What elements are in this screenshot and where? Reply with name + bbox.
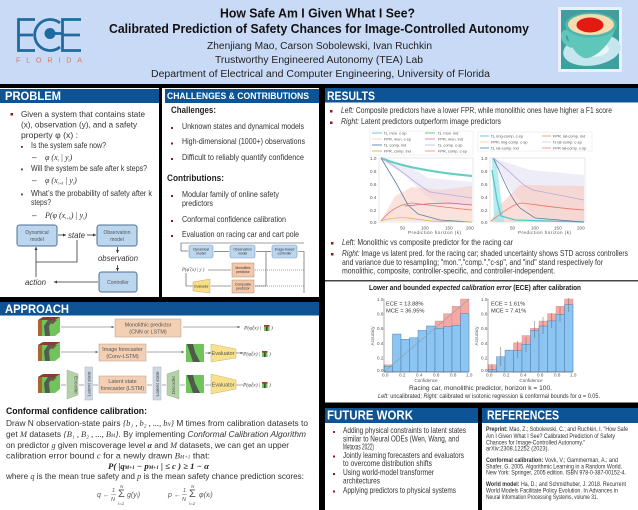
text block: reference list: arXiv:2308.12252 (2023). bbox=[486, 446, 549, 452]
bar chart: calibrated: ECE = 1.61% bbox=[491, 302, 525, 308]
formula: mean estimators: g(yi) bbox=[127, 492, 140, 499]
diagram: monolithic predictor pipeline: ) bbox=[270, 324, 273, 332]
text block: problem statement: – bbox=[32, 153, 37, 162]
diagram: latent state forecaster pipeline: ) bbox=[268, 382, 271, 388]
legend: left chart: f1, mon. c-sp bbox=[384, 130, 406, 136]
diagram: modular predictors bbox=[181, 243, 304, 293]
diagram: image forecaster pipeline: Evaluator bbox=[212, 351, 235, 357]
legend: right chart: FPR, lat-comp. ind bbox=[553, 134, 585, 138]
bar chart: uncalibrated: 0.4 bbox=[416, 372, 423, 378]
bar chart: uncalibrated: 0.6 bbox=[433, 372, 440, 378]
bar chart: calibrated: 1.0 bbox=[570, 372, 577, 378]
heading: references: REFERENCES bbox=[487, 408, 559, 422]
legend: right chart: f1, lat-comp. ind bbox=[491, 146, 519, 150]
text block: problem statement: steps? bbox=[31, 198, 51, 207]
legend: left chart: f1, comp. ind bbox=[384, 142, 406, 148]
text block: problem statement: | y bbox=[63, 176, 73, 185]
text block: conformal confidence calibration: Draw N observation-state pairs {b₁ , b₂ , ..., bN} M times from calibration datasets to bbox=[6, 418, 308, 428]
text block: problem statement: ) bbox=[73, 176, 77, 185]
text block: challenges: High-dimensional (1000+) observations bbox=[182, 137, 305, 146]
heading: problem: PROBLEM bbox=[5, 91, 61, 103]
text block: results bottom bullets: Left: Monolithic vs composite predictor for the racing car bbox=[342, 238, 513, 247]
heading: problem bbox=[0, 89, 159, 103]
line chart: monolithic vs composite: 1.0 bbox=[370, 156, 377, 161]
text block: contributions: predictors bbox=[182, 199, 213, 208]
text block: future work items: Adding physical constraints to latent states bbox=[343, 426, 466, 435]
line chart: image vs latent: 0.4 bbox=[481, 195, 488, 200]
bar chart: uncalibrated: 0.4 bbox=[377, 341, 384, 346]
authors and affiliation bbox=[151, 41, 490, 80]
bar chart: calibrated: 0.4 bbox=[481, 341, 488, 346]
text block: results bottom bullets: monolithic, composite, controller-specific, and controller-independent. bbox=[342, 266, 555, 276]
heading: results: RESULTS bbox=[327, 89, 375, 103]
text block: problem statement: t bbox=[73, 180, 75, 186]
line chart: monolithic vs composite bbox=[370, 156, 474, 235]
line chart: monolithic vs composite: 0.0 bbox=[370, 220, 377, 225]
diagram: modular predictors: controller bbox=[278, 252, 292, 256]
heading: results bbox=[325, 88, 638, 103]
diagram: modular predictors: Evaluator bbox=[194, 284, 210, 288]
diagram: image forecaster pipeline bbox=[38, 342, 271, 362]
diagram: closed-loop system: observation bbox=[98, 254, 139, 263]
text block: problem statement: t bbox=[58, 158, 60, 162]
legend: right chart: FPR lat-comp. c-sp bbox=[553, 146, 586, 150]
heading: approach bbox=[0, 302, 319, 316]
bar chart: calibrated: Accuracy bbox=[474, 326, 479, 345]
text block: results bottom bullets bbox=[331, 238, 628, 276]
text block: conformal confidence calibration bbox=[6, 406, 308, 460]
diagram: modular predictors: predictor bbox=[236, 286, 250, 290]
text block: challenges bbox=[171, 105, 305, 162]
bar chart: uncalibrated: 0.8 bbox=[377, 312, 384, 316]
chart caption: Left: uncalibrated; Right: calibrated w/ isotonic regression & conformal bounds for α = 0.05. bbox=[378, 393, 600, 400]
text block: problem statement: Will the system be safe after k steps? bbox=[31, 164, 147, 173]
line chart: image vs latent: 1.0 bbox=[481, 156, 488, 161]
text block: future work items: architectures bbox=[343, 476, 380, 486]
bar chart: calibrated: MCE = 7.41% bbox=[491, 308, 526, 314]
legend: right chart: f1 lat-comp. c-sp bbox=[553, 140, 582, 144]
line chart: image vs latent: Prediction horizon (k) bbox=[518, 230, 571, 235]
text block: problem statement: t bbox=[69, 158, 71, 162]
diagram: modular predictors: P(φ̃ (x) | y ) bbox=[181, 268, 205, 273]
text block: contributions: Modular family of online safety bbox=[182, 190, 280, 199]
diagram: modular predictors: Monolithic bbox=[235, 266, 251, 270]
heading: challenges and contributions: CHALLENGES & CONTRIBUTIONS bbox=[167, 91, 309, 102]
diagram: closed-loop system: Observation bbox=[104, 230, 131, 236]
text block: contributions bbox=[167, 173, 299, 239]
line chart: image vs latent: 0.2 bbox=[481, 208, 488, 213]
bar chart: calibrated: Confidence bbox=[519, 378, 543, 383]
panel: results bbox=[325, 88, 638, 280]
line chart: image vs latent: 0.6 bbox=[481, 182, 488, 187]
text block: problem statement: Is the system safe now? bbox=[31, 141, 106, 150]
text block: problem statement: t+k bbox=[65, 216, 71, 220]
bar chart: calibrated: 0.4 bbox=[520, 372, 527, 378]
formula: mean estimators: p ← bbox=[167, 492, 181, 499]
text block: future work items: Metaxas 2022) bbox=[343, 442, 374, 452]
diagram: monolithic predictor pipeline: Monolithic predictor bbox=[125, 322, 172, 328]
bar chart: uncalibrated: 0.0 bbox=[377, 368, 384, 373]
diagram: image forecaster pipeline: Image forecaster bbox=[102, 347, 143, 353]
bar chart: uncalibrated: 0.8 bbox=[450, 372, 457, 378]
text block: problem statement: ) bbox=[83, 211, 87, 220]
legend: left chart: f1, mon. ind bbox=[438, 130, 458, 136]
diagram: latent state forecaster pipeline: Evaluator bbox=[212, 382, 235, 388]
legend: right chart bbox=[478, 132, 592, 151]
text block: results top bullets bbox=[330, 106, 612, 126]
text block: conformal confidence calibration: on predictor g given miscoverage level α and M datasets, we can get an upper bbox=[6, 440, 289, 450]
text block: challenges: Unknown states and dynamical models bbox=[182, 122, 304, 131]
bar chart: uncalibrated: Confidence bbox=[414, 378, 438, 383]
diagram: latent state forecaster pipeline: Encoder bbox=[72, 376, 78, 394]
diagram: closed-loop system bbox=[17, 225, 139, 292]
text block: reference list: Conformal calibration: Vovk, V.; Gammerman, A.; and bbox=[486, 457, 618, 464]
diagram: latent state forecaster pipeline: forecaster (LSTM) bbox=[101, 386, 144, 392]
diagram: latent state forecaster pipeline bbox=[38, 367, 271, 400]
formula: mean estimators: 1 bbox=[112, 488, 115, 494]
text block: problem statement: – bbox=[32, 211, 37, 220]
logo: ECE Florida: FLORIDA bbox=[16, 56, 82, 64]
text block: conformal confidence calibration: Conformal confidence calibration: bbox=[6, 406, 147, 416]
line chart: image vs latent: 0.8 bbox=[481, 169, 488, 174]
logo: ECE Florida bbox=[16, 20, 82, 64]
line chart: image vs latent: 50 bbox=[510, 226, 516, 230]
legend: right chart: FPR, img-comp. c-sp bbox=[491, 140, 528, 144]
legend: right chart: f1, img-comp. c-sp bbox=[491, 134, 523, 138]
line chart: monolithic vs composite: 0.8 bbox=[370, 169, 377, 174]
panel: references bbox=[482, 408, 638, 510]
panel: problem bbox=[0, 88, 159, 297]
line chart: image vs latent: 0.0 bbox=[481, 220, 488, 225]
diagram: monolithic predictor pipeline: (CNN or LSTM) bbox=[129, 330, 167, 336]
text block: future work items bbox=[333, 426, 466, 495]
formula: mean estimators: N bbox=[111, 497, 115, 503]
heading: approach: APPROACH bbox=[5, 302, 69, 316]
text block: challenges: Challenges: bbox=[171, 105, 216, 115]
diagram: closed-loop system: Dynamical bbox=[25, 230, 49, 236]
legend: left chart: FPR, comp. ind bbox=[384, 148, 411, 154]
bar chart: uncalibrated: 0.0 bbox=[382, 372, 389, 378]
diagram: closed-loop system: Controller bbox=[107, 280, 129, 286]
chart caption: Racing car, monolithic predictor, horizon k = 100. bbox=[409, 385, 552, 392]
panel: calibration results bbox=[325, 280, 638, 402]
text block: future work items: Applying predictors to physical systems bbox=[343, 486, 456, 495]
text block: results top bullets: Right: Latent predictors outperform image predictors bbox=[341, 117, 501, 126]
formula: mean estimators: i=1 bbox=[118, 501, 125, 506]
formula: mean estimators: q ← bbox=[97, 492, 110, 499]
bar chart: uncalibrated: MCE = 36.95% bbox=[386, 308, 424, 314]
title: Calibrated Prediction of Safety Chances for Image-Controlled Autonomy bbox=[109, 22, 529, 36]
authors and affiliation: Trustworthy Engineered Autonomy (TEA) Lab bbox=[215, 55, 423, 66]
line chart: monolithic vs composite: 200 bbox=[466, 226, 474, 230]
text block: conformal confidence calibration: get M datasets {B₁ , B₂ , ..., BM}. By implementing Conformal Calibration Algorithm bbox=[6, 429, 306, 439]
text block: problem statement: φ (x bbox=[45, 153, 58, 162]
bar chart: calibrated: 0.2 bbox=[503, 372, 510, 378]
diagram: closed-loop system: model bbox=[110, 237, 124, 243]
panel: challenges and contributions bbox=[162, 88, 319, 297]
bar chart: calibrated bbox=[474, 297, 577, 383]
text block: future work items: Using world-model transformer bbox=[343, 468, 434, 477]
bar chart: calibrated: 1.0 bbox=[481, 297, 488, 302]
bar chart: uncalibrated bbox=[370, 297, 473, 383]
text block: contributions: Evaluation on racing car and cart pole bbox=[182, 230, 299, 239]
line chart: monolithic vs composite: 50 bbox=[400, 226, 406, 230]
text block: problem statement: What’s the probability of safety after k bbox=[31, 189, 153, 198]
line chart: image vs latent: 150 bbox=[554, 226, 562, 230]
icon: tea cup bbox=[558, 7, 623, 72]
diagram: closed-loop system: state bbox=[68, 231, 86, 240]
text block: problem statement: – bbox=[32, 176, 37, 185]
legend: left chart: FPR, mon. ind bbox=[438, 136, 463, 142]
heading: future work bbox=[325, 408, 478, 423]
line chart: monolithic vs composite: 0.4 bbox=[370, 195, 377, 200]
bar chart: uncalibrated: Accuracy bbox=[370, 326, 375, 345]
line chart: image vs latent bbox=[481, 156, 585, 235]
legend: left chart: f1, comp. c-sp bbox=[438, 142, 462, 148]
text block: future work items: to overcome distribution shifts bbox=[343, 459, 432, 468]
diagram: latent state forecaster pipeline: Latent state bbox=[86, 371, 92, 397]
title: How Safe Am I Given What I See? bbox=[220, 6, 415, 20]
diagram: modular predictors: Dynamical bbox=[193, 248, 209, 252]
formula: mean estimators: Σ bbox=[189, 488, 196, 500]
text block: problem statement: t+k bbox=[58, 180, 63, 186]
text block: problem statement: Given a system that contains state bbox=[21, 109, 145, 119]
text block: reference list: Chances for Image-Controlled Autonomy." bbox=[486, 440, 586, 446]
bar chart: uncalibrated: 1.0 bbox=[377, 297, 384, 302]
authors and affiliation: Department of Electrical and Computer Engineering, University of Florida bbox=[151, 69, 490, 80]
line chart: monolithic vs composite: 150 bbox=[445, 226, 453, 230]
formula: mean estimators bbox=[97, 484, 213, 506]
text block: reference list: Neural Information Processing Systems, volume 31. bbox=[486, 494, 598, 501]
diagram: monolithic predictor pipeline bbox=[38, 317, 273, 337]
header band bbox=[0, 0, 638, 84]
text block: problem statement: t bbox=[83, 216, 85, 220]
diagram: image forecaster pipeline: ) bbox=[268, 350, 271, 358]
bar chart: calibrated: 0.0 bbox=[486, 372, 493, 378]
text block: problem statement: P(φ (x bbox=[45, 211, 65, 220]
formula: mean estimators: N bbox=[191, 484, 195, 489]
diagram: latent state forecaster pipeline: Decoder bbox=[171, 376, 177, 394]
formula: mean estimators: N bbox=[120, 484, 124, 489]
formula: mean estimators: N bbox=[182, 497, 186, 503]
text block: problem statement: property φ (x) : bbox=[21, 130, 78, 140]
diagram: modular predictors: Image-based bbox=[275, 248, 295, 252]
text block: conformal confidence calibration: calibration error bound c for a newly drawn BM+1 that: bbox=[6, 450, 210, 460]
diagram: latent state forecaster pipeline: Latent state bbox=[155, 371, 161, 397]
authors and affiliation: Zhenjiang Mao, Carson Sobolewski, Ivan Ruchkin bbox=[207, 41, 432, 52]
line chart: monolithic vs composite: 100 bbox=[421, 226, 429, 230]
text block: future work items: similar to Neural ODEs (Wen, Wang, and bbox=[343, 434, 459, 444]
text block: problem statement: | y bbox=[59, 153, 69, 162]
diagram: latent state forecaster pipeline: Latent state bbox=[108, 379, 137, 385]
heading: references bbox=[482, 408, 638, 423]
line chart: image vs latent: 100 bbox=[531, 226, 539, 230]
panel: approach bbox=[0, 302, 319, 510]
bar chart: calibrated: 0.6 bbox=[537, 372, 544, 378]
legend: left chart: FPR, mon. c-sp bbox=[384, 136, 411, 142]
line chart: monolithic vs composite: 0.2 bbox=[370, 208, 377, 213]
diagram: modular predictors: Observation bbox=[233, 248, 252, 252]
line chart: image vs latent: 200 bbox=[577, 226, 585, 230]
bar chart: uncalibrated: 0.2 bbox=[399, 372, 406, 378]
legend: left chart bbox=[370, 130, 473, 155]
diagram: modular predictors: predictor bbox=[236, 270, 250, 274]
bar chart: uncalibrated: ECE = 13.88% bbox=[386, 302, 423, 308]
text block: problem statement: ) | y bbox=[70, 211, 84, 220]
text block: problem statement: ) bbox=[69, 153, 73, 162]
legend: left chart: FPR, comp. c-sp bbox=[438, 148, 467, 154]
text block: problem statement bbox=[10, 109, 153, 220]
formula: mean estimators: Σ bbox=[118, 488, 125, 500]
diagram: latent state forecaster pipeline: P(φ̃(x) | bbox=[242, 382, 261, 388]
diagram: closed-loop system: model bbox=[30, 237, 44, 243]
bar chart: calibrated: 0.8 bbox=[481, 312, 488, 316]
bar chart: calibrated: 0.0 bbox=[481, 368, 488, 373]
bar chart: calibrated: 0.2 bbox=[481, 356, 488, 360]
diagram: monolithic predictor pipeline: P(φ̃(x) | bbox=[243, 324, 262, 332]
diagram: image forecaster pipeline: P(φ̃(x) | bbox=[242, 350, 261, 358]
diagram: closed-loop system: action bbox=[25, 278, 47, 287]
line chart: monolithic vs composite: Prediction horizon (k) bbox=[408, 230, 461, 235]
line chart: monolithic vs composite: 0.6 bbox=[370, 182, 377, 187]
formula: mean estimators: i=1 bbox=[189, 501, 196, 506]
bar chart: uncalibrated: 0.6 bbox=[377, 326, 384, 331]
text block: challenges: Difficult to reliably quantify confidence bbox=[182, 153, 304, 162]
text block: future work items: Jointly learning forecasters and evaluators bbox=[343, 451, 464, 460]
formula: mean estimators: 1 bbox=[183, 488, 186, 494]
text block: contributions: Conformal confidence calibration bbox=[182, 215, 286, 224]
text block: contributions: Contributions: bbox=[167, 173, 224, 183]
chart title: Lower and bounded expected calibration error (ECE) after calibration bbox=[369, 283, 581, 292]
text block: problem statement: φ (x bbox=[45, 176, 58, 185]
panel: future work bbox=[325, 408, 478, 510]
text block: formula explanation: where q is the mean true safety and p is the mean safety chance prediction scores: bbox=[5, 471, 304, 481]
text block: reference list bbox=[486, 426, 628, 501]
title bbox=[109, 6, 529, 36]
diagram: modular predictors: model bbox=[238, 252, 247, 256]
chart caption bbox=[378, 385, 600, 400]
bar chart: uncalibrated: 0.2 bbox=[377, 356, 384, 360]
diagram: modular predictors: model bbox=[196, 252, 206, 256]
heading: future work: FUTURE WORK bbox=[327, 408, 413, 422]
formula: calibration bound: P( |qM+1 − pM+1 | ≤ c ) ≥ 1 − α bbox=[108, 461, 209, 471]
formula: mean estimators: φ(xi) bbox=[199, 492, 213, 499]
bar chart: uncalibrated: 1.0 bbox=[466, 372, 473, 378]
diagram: image forecaster pipeline: (Conv-LSTM) bbox=[106, 354, 139, 360]
diagram: modular predictors: Composite bbox=[235, 282, 251, 286]
bar chart: calibrated: 0.8 bbox=[554, 372, 561, 378]
text block: problem statement: (x), observation (y), and a safety bbox=[21, 120, 138, 130]
bar chart: calibrated: 0.6 bbox=[481, 326, 488, 331]
